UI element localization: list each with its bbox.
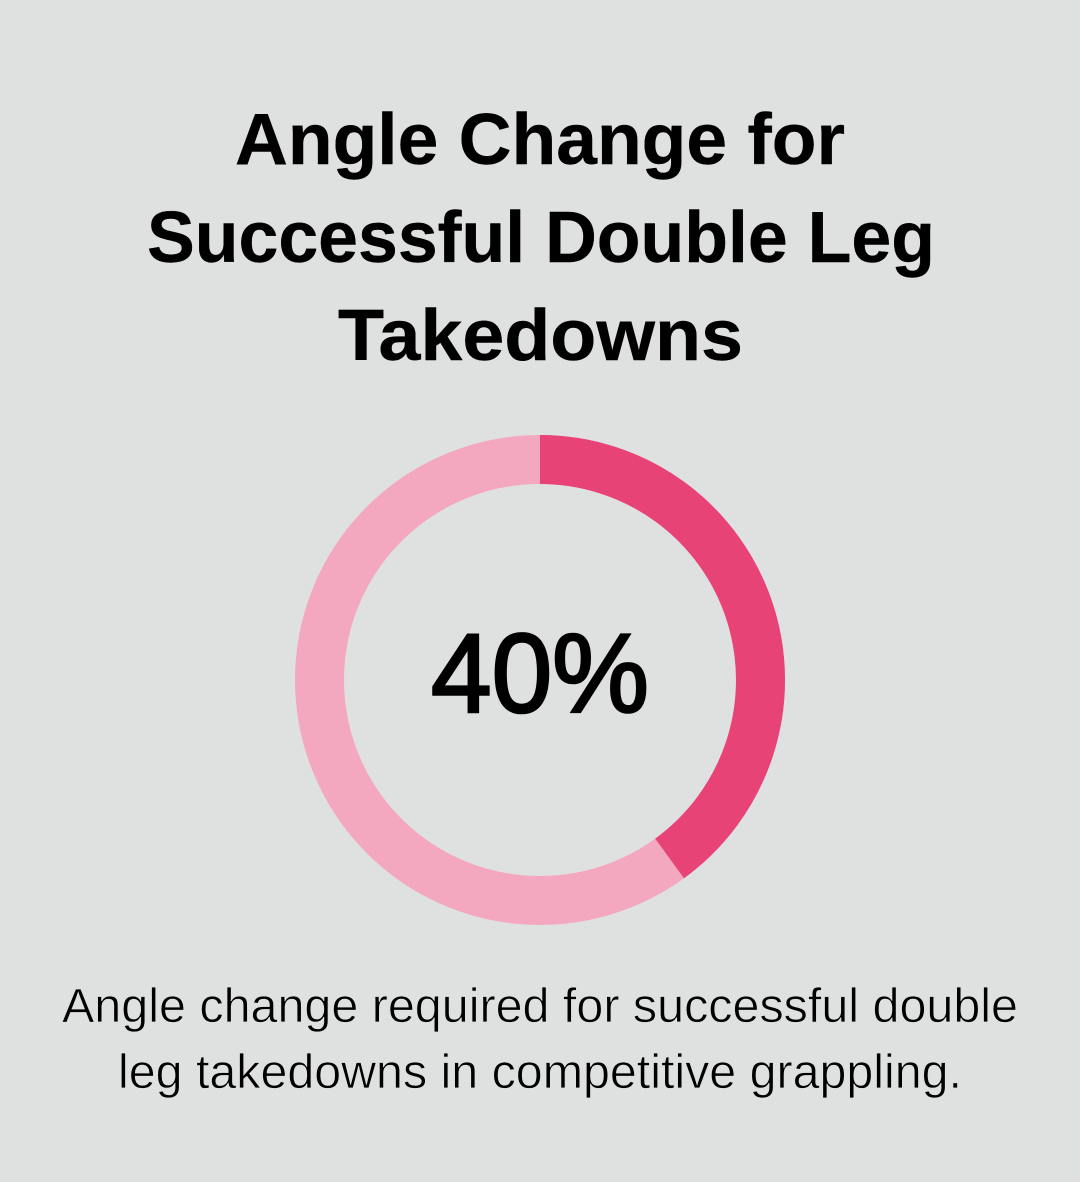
title: Successful Double Leg bbox=[147, 198, 935, 278]
caption: Angle change required for successful double bbox=[62, 980, 1018, 1033]
title bbox=[147, 100, 935, 376]
donut chart: 40% bbox=[320, 460, 761, 900]
caption: leg takedowns in competitive grappling. bbox=[118, 1046, 962, 1099]
value: 40%: 40% bbox=[431, 611, 649, 736]
title: Takedowns bbox=[338, 296, 743, 376]
title: Angle Change for bbox=[235, 100, 845, 180]
caption bbox=[62, 980, 1018, 1099]
